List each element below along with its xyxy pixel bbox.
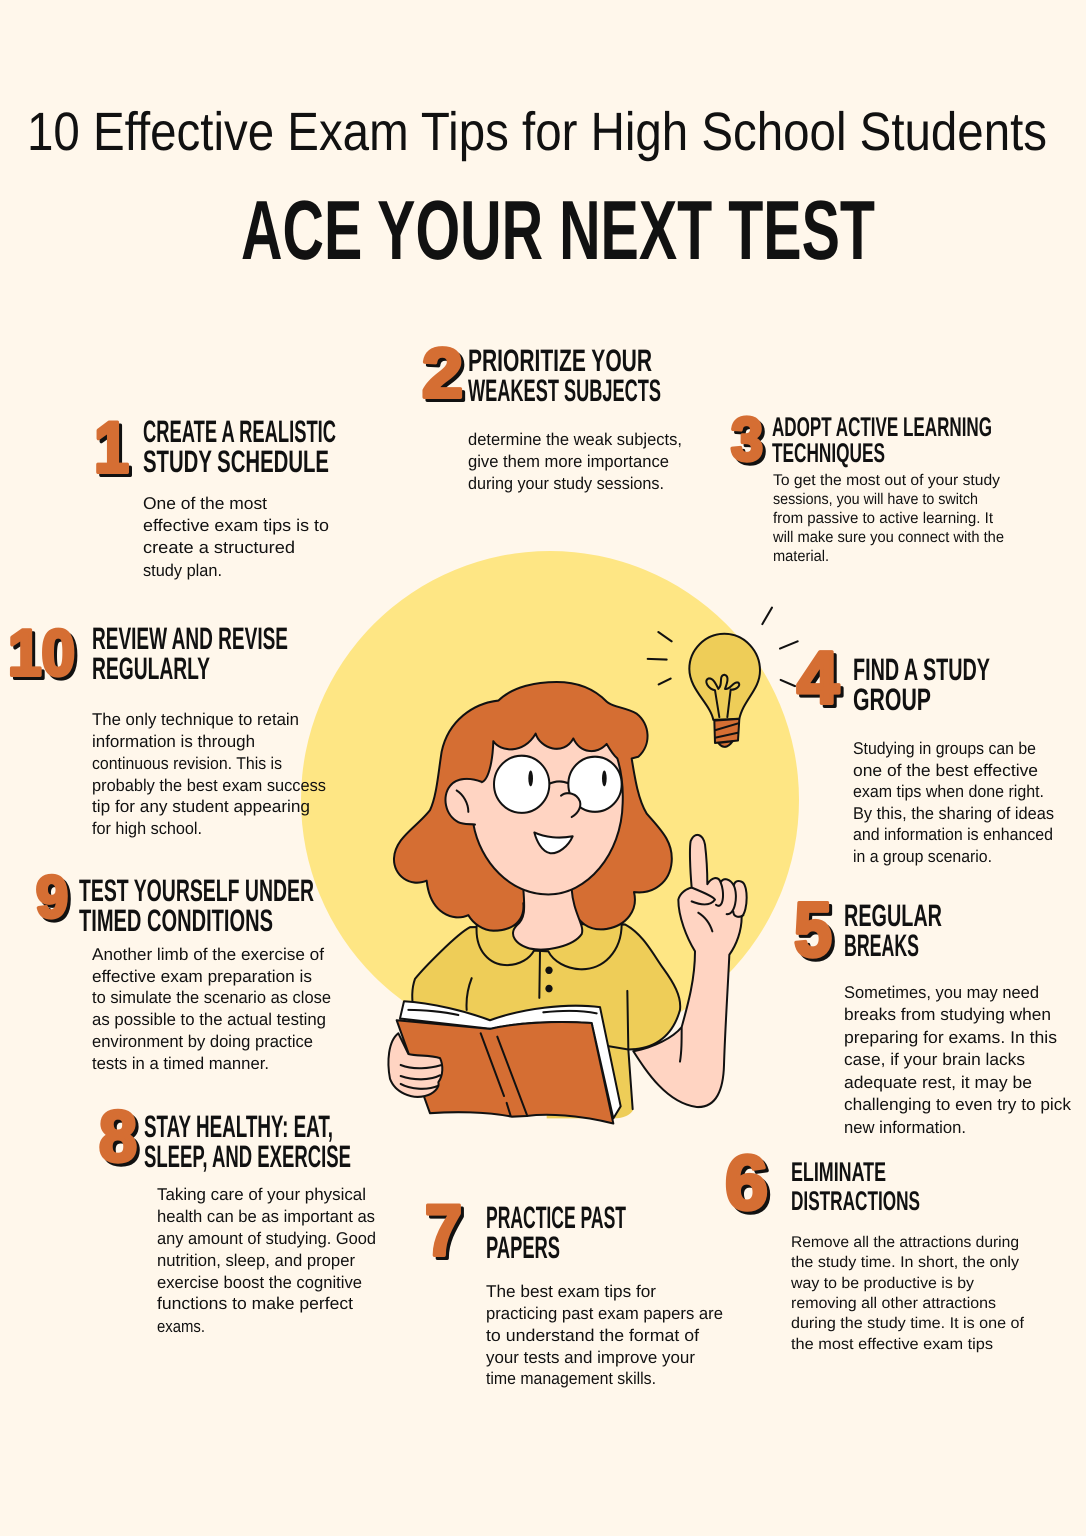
body 3: sessions, you will have to switch bbox=[773, 491, 978, 508]
body 6: during the study time. It is one of bbox=[791, 1315, 1025, 1332]
heading 3 bbox=[772, 412, 992, 468]
number 8: 8 bbox=[99, 1097, 137, 1177]
nose bbox=[561, 793, 580, 817]
light rays bbox=[648, 608, 798, 686]
ear bbox=[445, 779, 482, 825]
body 4: exam tips when done right. bbox=[853, 782, 1044, 801]
number 1: 1 bbox=[94, 408, 129, 488]
body 5: adequate rest, it may be bbox=[844, 1073, 1032, 1092]
body 5: preparing for exams. In this bbox=[844, 1028, 1057, 1047]
heading 7 bbox=[486, 1200, 626, 1265]
body 9: tests in a timed manner. bbox=[92, 1054, 269, 1073]
body 3 bbox=[772, 472, 1004, 565]
face bbox=[473, 734, 623, 894]
body 9: effective exam preparation is bbox=[92, 967, 312, 986]
tip 3: adopt active learning techniques bbox=[731, 405, 1004, 565]
body 7: your tests and improve your bbox=[486, 1348, 695, 1367]
shirt bbox=[412, 924, 680, 1118]
body 8: Taking care of your physical bbox=[157, 1185, 366, 1204]
body 8: any amount of studying. Good bbox=[157, 1229, 376, 1248]
tip 9: test yourself under timed conditions bbox=[36, 864, 331, 1073]
body 10 bbox=[92, 710, 326, 838]
heading 8 bbox=[144, 1109, 351, 1174]
heading 1: CREATE A REALISTIC bbox=[143, 414, 336, 449]
body 8: exams. bbox=[157, 1317, 205, 1336]
tip 1: create a realistic study schedule bbox=[94, 408, 336, 580]
body 7: to understand the format of bbox=[486, 1326, 699, 1345]
body 8: exercise boost the cognitive bbox=[157, 1273, 362, 1292]
body 5: challenging to even try to pick bbox=[844, 1095, 1072, 1114]
body 6: the most effective exam tips bbox=[791, 1336, 993, 1353]
body 5 bbox=[844, 983, 1072, 1137]
pointing arm and hand bbox=[633, 835, 747, 1107]
heading 2: WEAKEST SUBJECTS bbox=[468, 373, 661, 408]
body 5: new information. bbox=[844, 1118, 966, 1137]
body 10: probably the best exam success bbox=[92, 776, 326, 795]
number 4: 4 bbox=[797, 636, 839, 719]
body 6 bbox=[790, 1234, 1025, 1353]
body 4 bbox=[853, 739, 1054, 866]
body 1: study plan. bbox=[143, 561, 222, 580]
heading 5: BREAKS bbox=[844, 928, 919, 963]
hair bbox=[394, 682, 672, 931]
tip 2: prioritize your weakest subjects bbox=[422, 334, 682, 493]
body 7: practicing past exam papers are bbox=[486, 1304, 723, 1323]
heading 8: STAY HEALTHY: EAT, bbox=[144, 1109, 333, 1144]
body 3: material. bbox=[773, 548, 829, 565]
heading 4: GROUP bbox=[853, 682, 931, 717]
heading 10: REGULARLY bbox=[92, 651, 210, 686]
body 2 bbox=[468, 430, 682, 493]
tip 6: eliminate distractions bbox=[725, 1140, 1025, 1353]
tip 7: practice past papers bbox=[425, 1191, 723, 1388]
body 8: functions to make perfect bbox=[157, 1294, 353, 1313]
body 2: give them more importance bbox=[468, 452, 669, 471]
body 6: the study time. In short, the only bbox=[791, 1254, 1019, 1271]
body 3: will make sure you connect with the bbox=[772, 529, 1004, 546]
body 9 bbox=[92, 945, 331, 1073]
body 8: health can be as important as bbox=[157, 1207, 375, 1226]
heading 7: PRACTICE PAST bbox=[486, 1200, 626, 1235]
body 8: nutrition, sleep, and proper bbox=[157, 1251, 355, 1270]
illustration: girl with book and light bulb bbox=[388, 608, 798, 1124]
icon: light bulb bbox=[689, 634, 760, 747]
body 3: from passive to active learning. It bbox=[773, 510, 994, 527]
hand holding book bbox=[388, 1033, 442, 1097]
heading 10 bbox=[92, 621, 288, 686]
heading 6 bbox=[791, 1157, 920, 1216]
body 10: for high school. bbox=[92, 819, 202, 838]
body 1: effective exam tips is to bbox=[143, 516, 329, 535]
body 7: time management skills. bbox=[486, 1369, 656, 1388]
number 5: 5 bbox=[794, 887, 832, 973]
neck bbox=[513, 889, 582, 950]
body 7: The best exam tips for bbox=[486, 1282, 656, 1301]
body 1: create a structured bbox=[143, 538, 295, 557]
body 2: during your study sessions. bbox=[468, 474, 664, 493]
body 10: tip for any student appearing bbox=[92, 797, 310, 816]
heading 1: STUDY SCHEDULE bbox=[143, 444, 329, 479]
body 4: one of the best effective bbox=[853, 761, 1038, 780]
heading 6: DISTRACTIONS bbox=[791, 1186, 920, 1216]
body 5: case, if your brain lacks bbox=[844, 1050, 1025, 1069]
heading 2 bbox=[468, 343, 661, 408]
tip 10: review and revise regularly bbox=[8, 616, 326, 838]
heading 9 bbox=[79, 873, 314, 938]
heading 3: TECHNIQUES bbox=[772, 438, 885, 468]
body 7 bbox=[486, 1282, 723, 1388]
heading 10: REVIEW AND REVISE bbox=[92, 621, 288, 656]
number 3: 3 bbox=[731, 405, 763, 473]
body 5: breaks from studying when bbox=[844, 1005, 1051, 1024]
heading 4: FIND A STUDY bbox=[853, 652, 990, 687]
body 5: Sometimes, you may need bbox=[844, 983, 1039, 1002]
body 9: as possible to the actual testing bbox=[92, 1010, 326, 1029]
number 2: 2 bbox=[422, 334, 463, 412]
glasses bbox=[494, 756, 622, 813]
body 3: To get the most out of your study bbox=[773, 472, 1000, 489]
number 6: 6 bbox=[725, 1140, 768, 1226]
body 10: The only technique to retain bbox=[92, 710, 299, 729]
heading 9: TEST YOURSELF UNDER bbox=[79, 873, 314, 908]
body 4: By this, the sharing of ideas bbox=[853, 804, 1054, 823]
heading 7: PAPERS bbox=[486, 1230, 560, 1265]
body 9: Another limb of the exercise of bbox=[92, 945, 324, 964]
heading 6: ELIMINATE bbox=[791, 1157, 886, 1187]
body 10: information is through bbox=[92, 732, 255, 751]
open book bbox=[397, 1001, 621, 1124]
body 1 bbox=[143, 494, 329, 580]
heading 9: TIMED CONDITIONS bbox=[79, 903, 273, 938]
body 4: and information is enhanced bbox=[853, 825, 1053, 844]
number 7: 7 bbox=[425, 1191, 462, 1271]
heading 4 bbox=[853, 652, 990, 717]
collar bbox=[477, 924, 622, 969]
body 6: removing all other attractions bbox=[791, 1295, 996, 1312]
tip 5: regular breaks bbox=[794, 887, 1072, 1137]
body 4: Studying in groups can be bbox=[853, 739, 1036, 758]
body 9: to simulate the scenario as close bbox=[92, 988, 331, 1007]
yellow background circle bbox=[301, 551, 799, 1049]
mouth bbox=[534, 832, 573, 853]
body 1: One of the most bbox=[143, 494, 267, 513]
body 6: Remove all the attractions during bbox=[791, 1234, 1019, 1251]
body 4: in a group scenario. bbox=[853, 847, 992, 866]
body 8 bbox=[157, 1185, 376, 1336]
body 2: determine the weak subjects, bbox=[468, 430, 682, 449]
heading 8: SLEEP, AND EXERCISE bbox=[144, 1139, 351, 1174]
body 6: way to be productive is by bbox=[790, 1275, 974, 1292]
heading 2: PRIORITIZE YOUR bbox=[468, 343, 652, 378]
number 10: 10 bbox=[8, 616, 75, 689]
tip 8: stay healthy bbox=[99, 1097, 376, 1336]
number 9: 9 bbox=[36, 864, 68, 930]
body 10: continuous revision. This is bbox=[92, 754, 282, 773]
heading 1 bbox=[143, 414, 336, 479]
heading 5: REGULAR bbox=[844, 898, 942, 933]
tip 4: find a study group bbox=[797, 636, 1054, 866]
heading 5 bbox=[844, 898, 942, 963]
body 9: environment by doing practice bbox=[92, 1032, 313, 1051]
